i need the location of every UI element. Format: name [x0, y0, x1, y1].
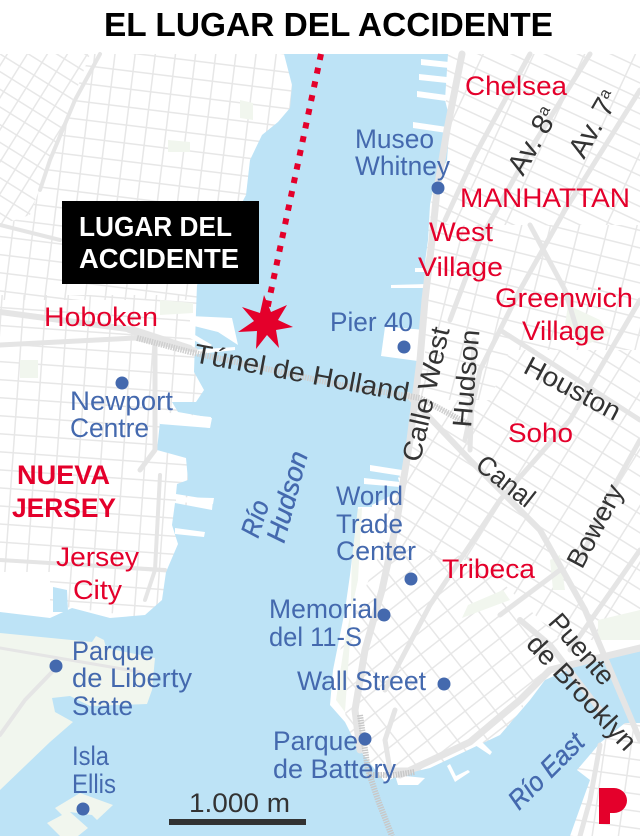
street labels: Hudson: [447, 328, 486, 429]
parks: [20, 100, 640, 712]
landmark labels: Museo: [355, 124, 434, 154]
street labels: a: [535, 103, 554, 119]
street labels: Canal: [470, 449, 541, 513]
neighbourhood labels: Hoboken: [44, 302, 158, 332]
neighbourhood labels: MANHATTAN: [460, 183, 630, 213]
scale bar: [169, 788, 306, 825]
landmark labels: [70, 124, 450, 799]
neighbourhood labels: City: [73, 575, 123, 605]
callout: lugar del accidente: ACCIDENTE: [79, 243, 239, 274]
street labels: Bowery: [561, 479, 630, 573]
neighbourhood labels: [12, 71, 633, 605]
landmark labels: State: [72, 691, 133, 721]
landmark labels: Whitney: [355, 151, 450, 181]
callout: lugar del accidente: [62, 201, 259, 284]
landmark labels: Parque: [273, 726, 358, 756]
street labels: Túnel de Holland: [192, 338, 412, 408]
location dots: [50, 182, 450, 816]
street labels: Puente: [542, 607, 621, 691]
landmark labels: Isla: [72, 741, 110, 771]
neighbourhood labels: Village: [418, 252, 503, 282]
street labels: Calle West: [397, 324, 456, 464]
street labels: Av. 7: [562, 93, 622, 164]
neighbourhood labels: Village: [522, 316, 605, 346]
scale bar: 1.000 m: [189, 788, 290, 818]
road: Holland Tunnel: [137, 338, 470, 425]
icon: crash star: [238, 295, 293, 349]
street labels: a: [596, 86, 615, 102]
landmark labels: World: [336, 481, 403, 511]
neighbourhood labels: Jersey: [56, 542, 140, 572]
title: EL LUGAR DEL ACCIDENTE: [104, 6, 553, 43]
landmark labels: de Liberty: [72, 663, 193, 693]
street labels: Houston: [519, 351, 626, 427]
landmark labels: Trade: [336, 509, 403, 539]
landmark labels: Wall Street: [297, 666, 426, 696]
inlet: Jersey City basin: [53, 587, 68, 612]
landmark labels: Newport: [70, 386, 174, 416]
water labels: Río: [235, 496, 275, 541]
landmark labels: de Battery: [273, 754, 396, 784]
landmark labels: Pier 40: [330, 307, 413, 337]
park: Liberty State: [0, 633, 155, 790]
street labels: [192, 85, 640, 757]
landmark labels: Centre: [70, 413, 149, 443]
route: dotted flight path: [267, 54, 321, 310]
neighbourhood labels: NUEVA: [17, 460, 110, 490]
water labels: Río East: [502, 726, 591, 815]
water labels: [235, 448, 591, 815]
landmark labels: Center: [336, 536, 416, 566]
park: Isla Ellis: [47, 793, 113, 836]
neighbourhood labels: Tribeca: [442, 554, 536, 584]
neighbourhood labels: JERSEY: [12, 493, 116, 523]
neighbourhood labels: West: [429, 217, 494, 247]
landmark labels: Parque: [72, 636, 154, 666]
neighbourhood labels: Greenwich: [495, 283, 633, 313]
landmark labels: Memorial: [269, 594, 378, 624]
street labels: Av. 8: [501, 110, 561, 180]
piers: [160, 59, 528, 785]
callout: lugar del accidente: LUGAR DEL: [79, 211, 232, 242]
icon: publisher logo: [599, 788, 627, 824]
neighbourhood labels: Soho: [508, 418, 573, 448]
road: Brooklyn-Battery Tunnel: [360, 715, 415, 836]
landmark labels: del 11-S: [269, 622, 362, 652]
water labels: Hudson: [261, 448, 314, 546]
street labels: de Brooklyn: [521, 629, 640, 757]
landmark labels: Ellis: [72, 769, 116, 799]
neighbourhood labels: Chelsea: [465, 71, 568, 101]
